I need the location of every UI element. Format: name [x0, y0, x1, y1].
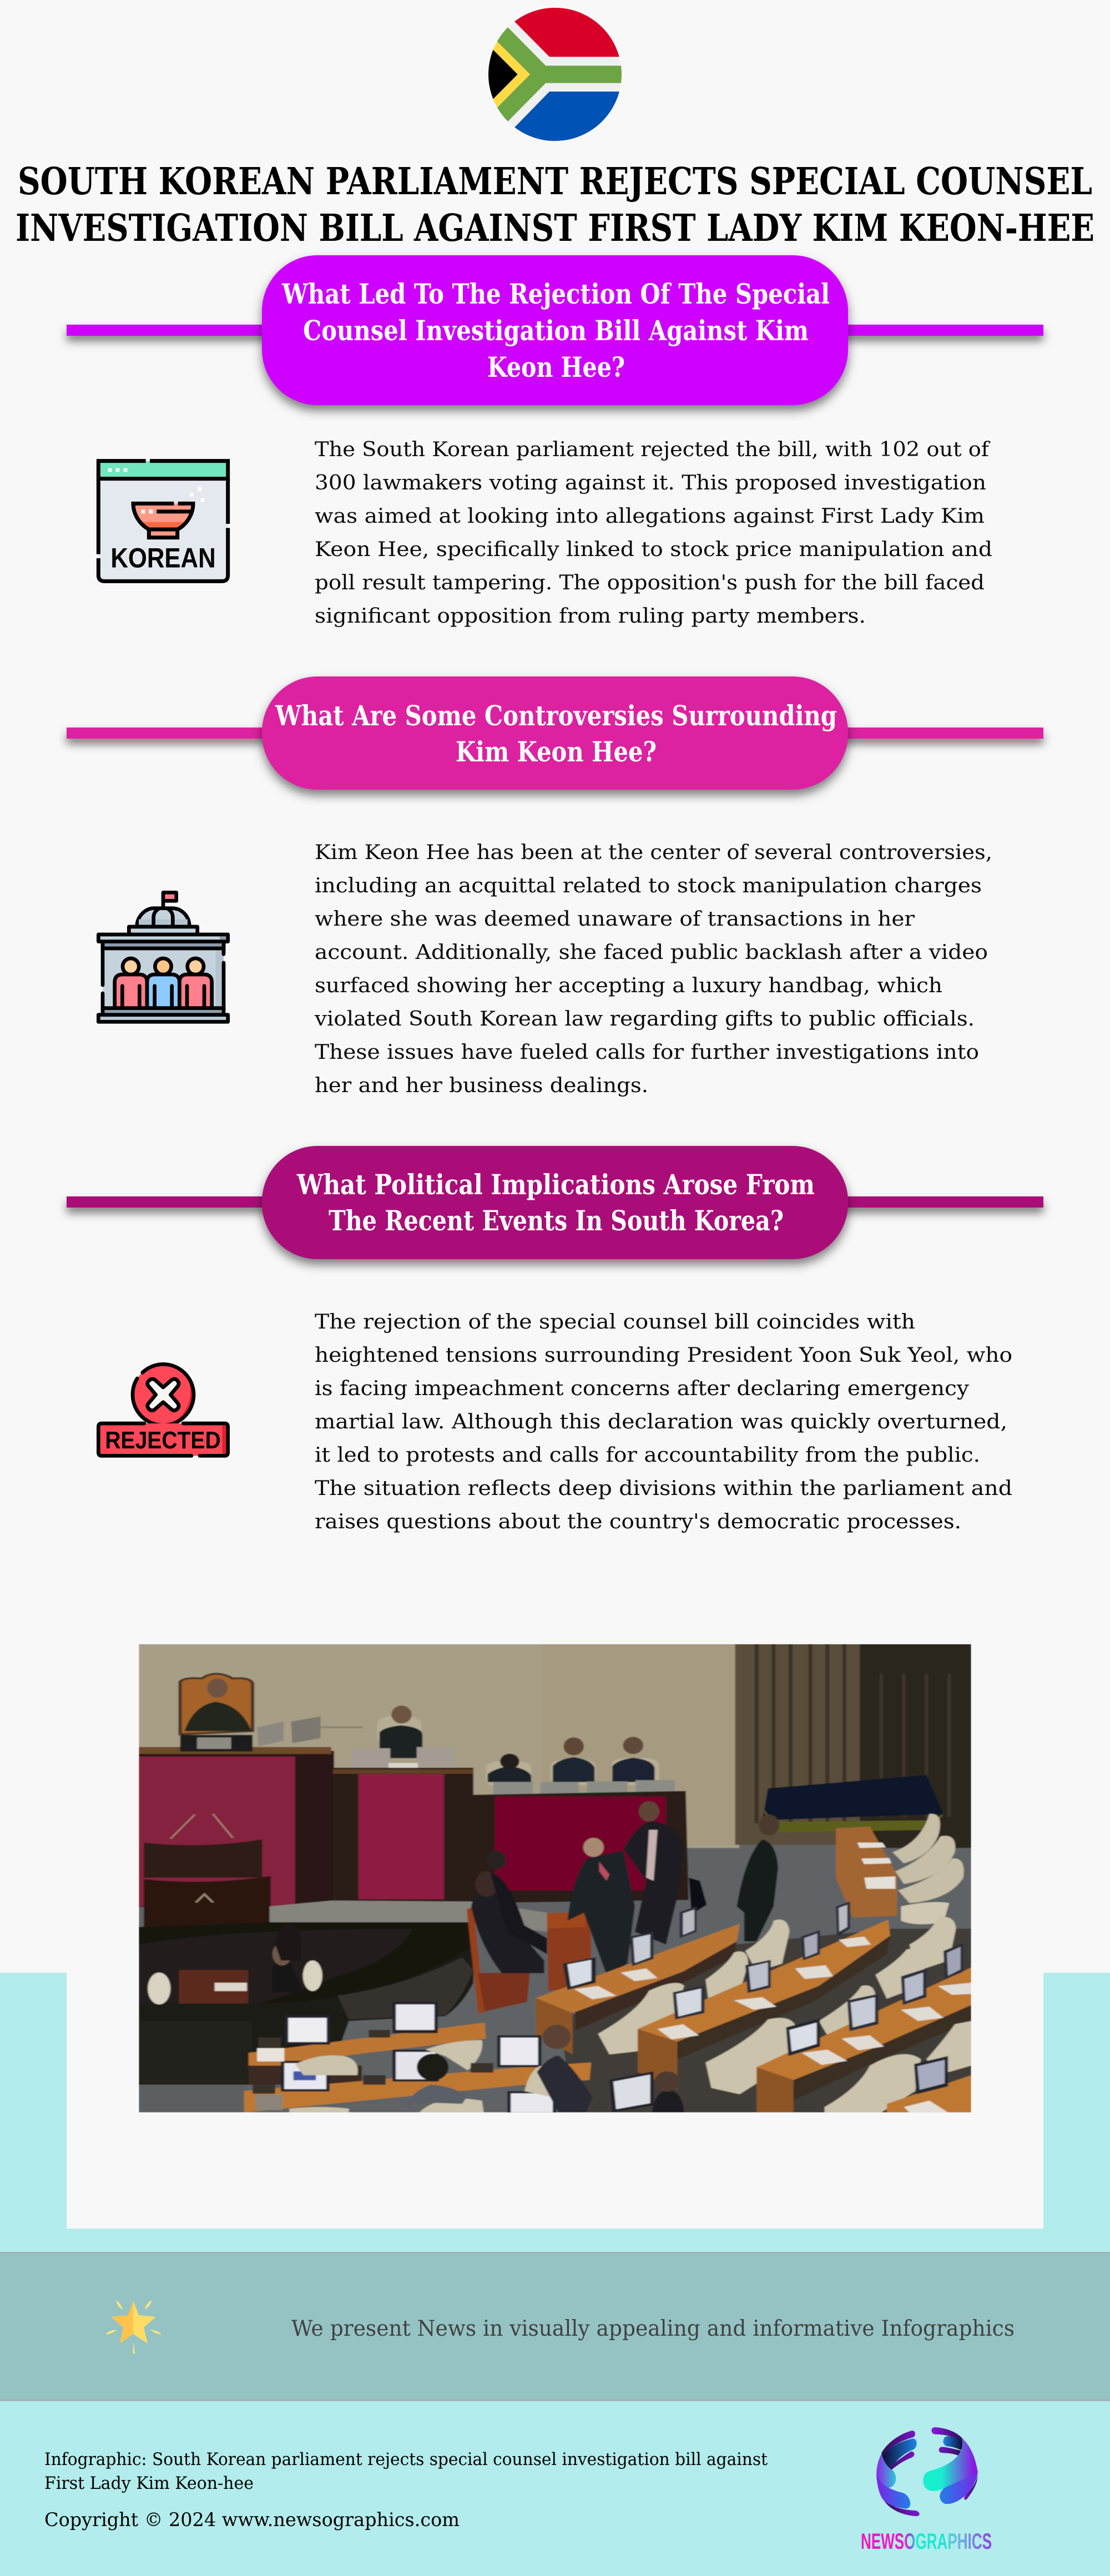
- section heading: what led to the rejection: Keon Hee?: [487, 351, 625, 383]
- section heading: what led to the rejection: [67, 255, 1043, 405]
- text block: political implications: raises questions about the country's democratic processes.: [315, 1511, 961, 1533]
- text block: rejection details: The South Korean parliament rejected the bill, with 102 out of: [315, 438, 991, 461]
- icon: parliament building with three members: [98, 892, 228, 1022]
- icon: Korean food browser window: [98, 461, 228, 581]
- dais 2 man: [377, 1716, 421, 1741]
- text block: rejection details: significant opposition from ruling party members.: [315, 605, 866, 628]
- desk row A: [536, 1924, 740, 2018]
- text block: rejection details: [315, 438, 992, 628]
- desk row B: [638, 1920, 890, 2048]
- teal lower background band: [0, 1973, 1110, 2576]
- third standing man: [737, 1840, 778, 1941]
- icon: South African flag: [488, 8, 622, 141]
- text block: controversies: including an acquittal related to stock manipulation charges: [315, 875, 982, 897]
- text block: political implications: heightened tensions surrounding President Yoon Suk Yeol, who: [315, 1344, 1012, 1367]
- tagline text: We present News in visually appealing and informative Infographics: [291, 2316, 1015, 2341]
- icon: Korean food browser window: KOREAN: [110, 543, 216, 574]
- text block: political implications: The situation reflects deep divisions within the parliament and: [315, 1477, 1012, 1500]
- dais 3 people: [486, 1761, 531, 1787]
- section heading: controversies: What Are Some Controversies Surrounding: [275, 699, 837, 732]
- seated men and chair: [467, 1906, 485, 2013]
- chairs bottom right: [825, 2054, 921, 2113]
- section heading: what led to the rejection: What Led To The Rejection Of The Special: [281, 277, 830, 310]
- shaded floor under desk rows: [558, 1928, 971, 2113]
- text block: rejection details: poll result tampering. The opposition's push for the bill faced: [315, 572, 985, 594]
- section heading: controversies: [67, 676, 1043, 790]
- platform and well: [270, 1901, 547, 1932]
- section heading: political implications: The Recent Events In South Korea?: [329, 1204, 784, 1237]
- text block: controversies: surfaced showing her accepting a luxury handbag, which: [315, 974, 942, 997]
- logo wordmark: NEWSOGRAPHICS: [861, 2529, 992, 2554]
- section heading: what led to the rejection: Counsel Investigation Bill Against Kim: [303, 314, 809, 347]
- text block: controversies: account. Additionally, she faced public backlash after a video: [315, 941, 988, 964]
- text block: political implications: martial law. Although this declaration was quickly overturned,: [315, 1411, 1007, 1433]
- helper: [623, 1821, 684, 1944]
- icon: logo globe mark: [876, 2427, 978, 2516]
- photo backing panel: [67, 1973, 1043, 2229]
- dais 1: [139, 1751, 334, 1907]
- footer credits: [44, 2449, 768, 2531]
- text block: controversies: Kim Keon Hee has been at the center of several controversies,: [315, 841, 992, 864]
- seated people foreground: [407, 2085, 467, 2107]
- text block: political implications: [315, 1311, 1012, 1533]
- text block: political implications: is facing impeachment concerns after declaring emergency: [315, 1377, 970, 1400]
- footer credits: First Lady Kim Keon-hee: [44, 2473, 254, 2493]
- text block: controversies: [314, 841, 992, 1097]
- icon: star with sparks: [106, 2300, 162, 2353]
- text block: rejection details: 300 lawmakers voting against it. This proposed investigation: [315, 472, 986, 494]
- icon: rejected stamp: REJECTED: [105, 1427, 221, 1454]
- desk row C: [756, 1967, 971, 2083]
- standing voter: [567, 1851, 635, 1975]
- right black table: [762, 1775, 944, 1820]
- ballot box: [547, 1912, 591, 1991]
- text block: controversies: violated South Korean law regarding gifts to public officials.: [314, 1008, 975, 1031]
- text block: controversies: where she was deemed unaware of transactions in her: [315, 908, 915, 931]
- right-top row desk and chairs: [836, 1827, 897, 1917]
- chairs between B and C: [910, 1917, 956, 1972]
- text block: rejection details: was aimed at looking into allegations against First Lady Kim: [315, 505, 985, 528]
- tagline band: [0, 2252, 1110, 2401]
- photo: parliament chamber vote: [139, 1644, 971, 2113]
- text block: political implications: The rejection of the special counsel bill coincides with: [315, 1311, 915, 1334]
- footer credits: Copyright © 2024 www.newsographics.com: [44, 2509, 460, 2531]
- icon: rejected stamp: [98, 1364, 228, 1456]
- text block: controversies: These issues have fueled calls for further investigations into: [315, 1041, 979, 1064]
- text block: controversies: her and her business dealings.: [315, 1074, 648, 1097]
- logo: Newsographics: [861, 2427, 992, 2554]
- text block: political implications: it led to protests and calls for accountability from the public.: [315, 1444, 980, 1467]
- lectern: [144, 1840, 262, 1878]
- section heading: political implications: [67, 1146, 1043, 1259]
- text block: rejection details: Keon Hee, specifically linked to stock price manipulation and: [315, 538, 992, 561]
- chairs between A and B: [745, 1920, 789, 1972]
- lower-left desks: [249, 2023, 486, 2072]
- section heading: controversies: Kim Keon Hee?: [456, 735, 657, 768]
- section heading: political implications: What Political Implications Arose From: [296, 1168, 815, 1201]
- footer credits: Infographic: South Korean parliament rejects special counsel investigation bill against: [44, 2449, 768, 2469]
- title: [16, 159, 1094, 250]
